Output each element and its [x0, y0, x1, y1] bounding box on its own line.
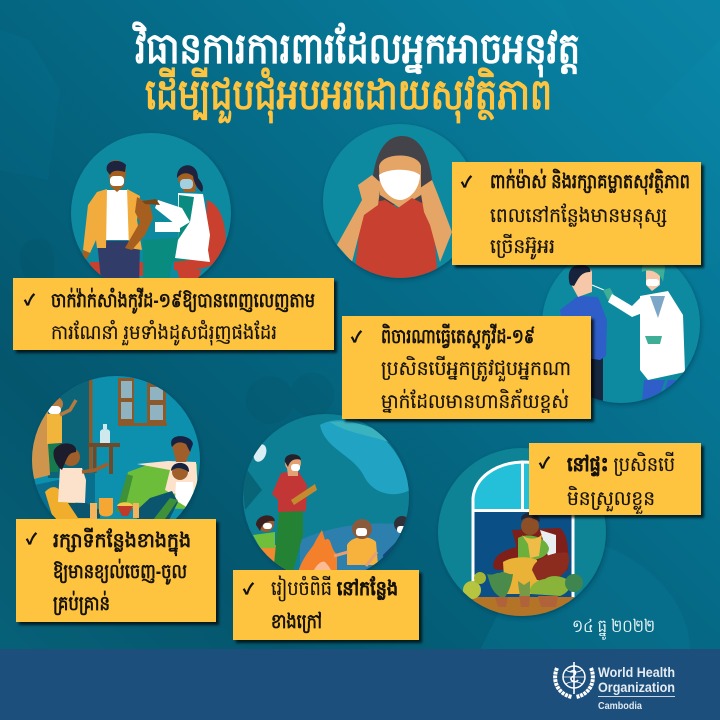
callout: testing: ប្រសិនបើអ្នកត្រូវជួបអ្នកណា — [381, 355, 571, 382]
illustration: ventilated room — [32, 376, 202, 519]
illustration: outdoor gathering — [240, 414, 410, 580]
callout: stay home: ✓ — [539, 455, 550, 472]
organization name: Organization — [598, 679, 675, 695]
WHO logo — [555, 662, 675, 712]
callout: stay home: មិនស្រួលខ្លួន — [567, 485, 655, 514]
callout: outdoors: រៀបចំពិធី នៅកន្លែង — [271, 575, 398, 602]
illustration: covid test — [542, 245, 700, 403]
WHO emblem — [555, 662, 593, 697]
callout: testing — [342, 316, 591, 419]
footer band — [0, 649, 720, 720]
callout: vaccination: ✓ — [24, 292, 35, 309]
title line 2: ដើម្បីជួបជុំអបអរដោយសុវត្ថិភាព — [145, 67, 552, 124]
illustration: vaccination — [71, 133, 231, 293]
callout: ventilation: គ្រប់គ្រាន់ — [53, 590, 110, 616]
callout: masks: ពេលនៅកន្លែងមានមនុស្ស — [490, 203, 667, 229]
callout: vaccination: ចាក់វ៉ាក់សាំងកូវីដ-១៩ឱ្យបានពេញលេញតាម — [51, 287, 315, 314]
callout: outdoors — [233, 570, 419, 640]
callout: ventilation: ✓ — [26, 531, 37, 548]
callout: stay home: នៅផ្ទះ ប្រសិនបើ — [567, 451, 675, 477]
callout: masks: ច្រើនអ៊ូអរ — [490, 233, 555, 260]
callout: outdoors: ខាងក្រៅ — [271, 611, 322, 634]
callout: ventilation — [16, 519, 216, 622]
illustration: staying home — [438, 448, 606, 620]
organization name — [598, 664, 675, 712]
callout: testing: ពិចារណាធ្វើតេស្តកូវីដ-១៩ — [381, 323, 535, 350]
callout: testing: ម្នាក់ដែលមានហានិភ័យខ្ពស់ — [381, 388, 569, 413]
organization name: Cambodia — [598, 701, 642, 712]
callout: masks: ✓ — [461, 174, 472, 191]
title line 1: វិធានការការពារដែលអ្នកអាចអនុវត្ត — [131, 21, 580, 78]
callout: stay home — [529, 443, 701, 515]
callout: ventilation: ឱ្យមានខ្យល់ចេញ-ចូល — [53, 558, 187, 585]
callout: vaccination — [13, 278, 334, 350]
callout: masks — [452, 162, 701, 265]
callout: outdoors: ✓ — [243, 581, 254, 598]
callout: ventilation: រក្សាទីកន្លែងខាងក្នុង — [53, 527, 191, 557]
illustration: person wearing mask — [323, 124, 477, 280]
organization name: World Health — [598, 664, 675, 680]
callout: vaccination: ការណែនាំ រួមទាំងដូសជំរុញផងដែរ — [51, 319, 277, 346]
title — [131, 21, 580, 124]
callout: testing: ✓ — [351, 329, 362, 346]
date: ១៤ ធ្នូ ២០២២ — [572, 616, 655, 640]
